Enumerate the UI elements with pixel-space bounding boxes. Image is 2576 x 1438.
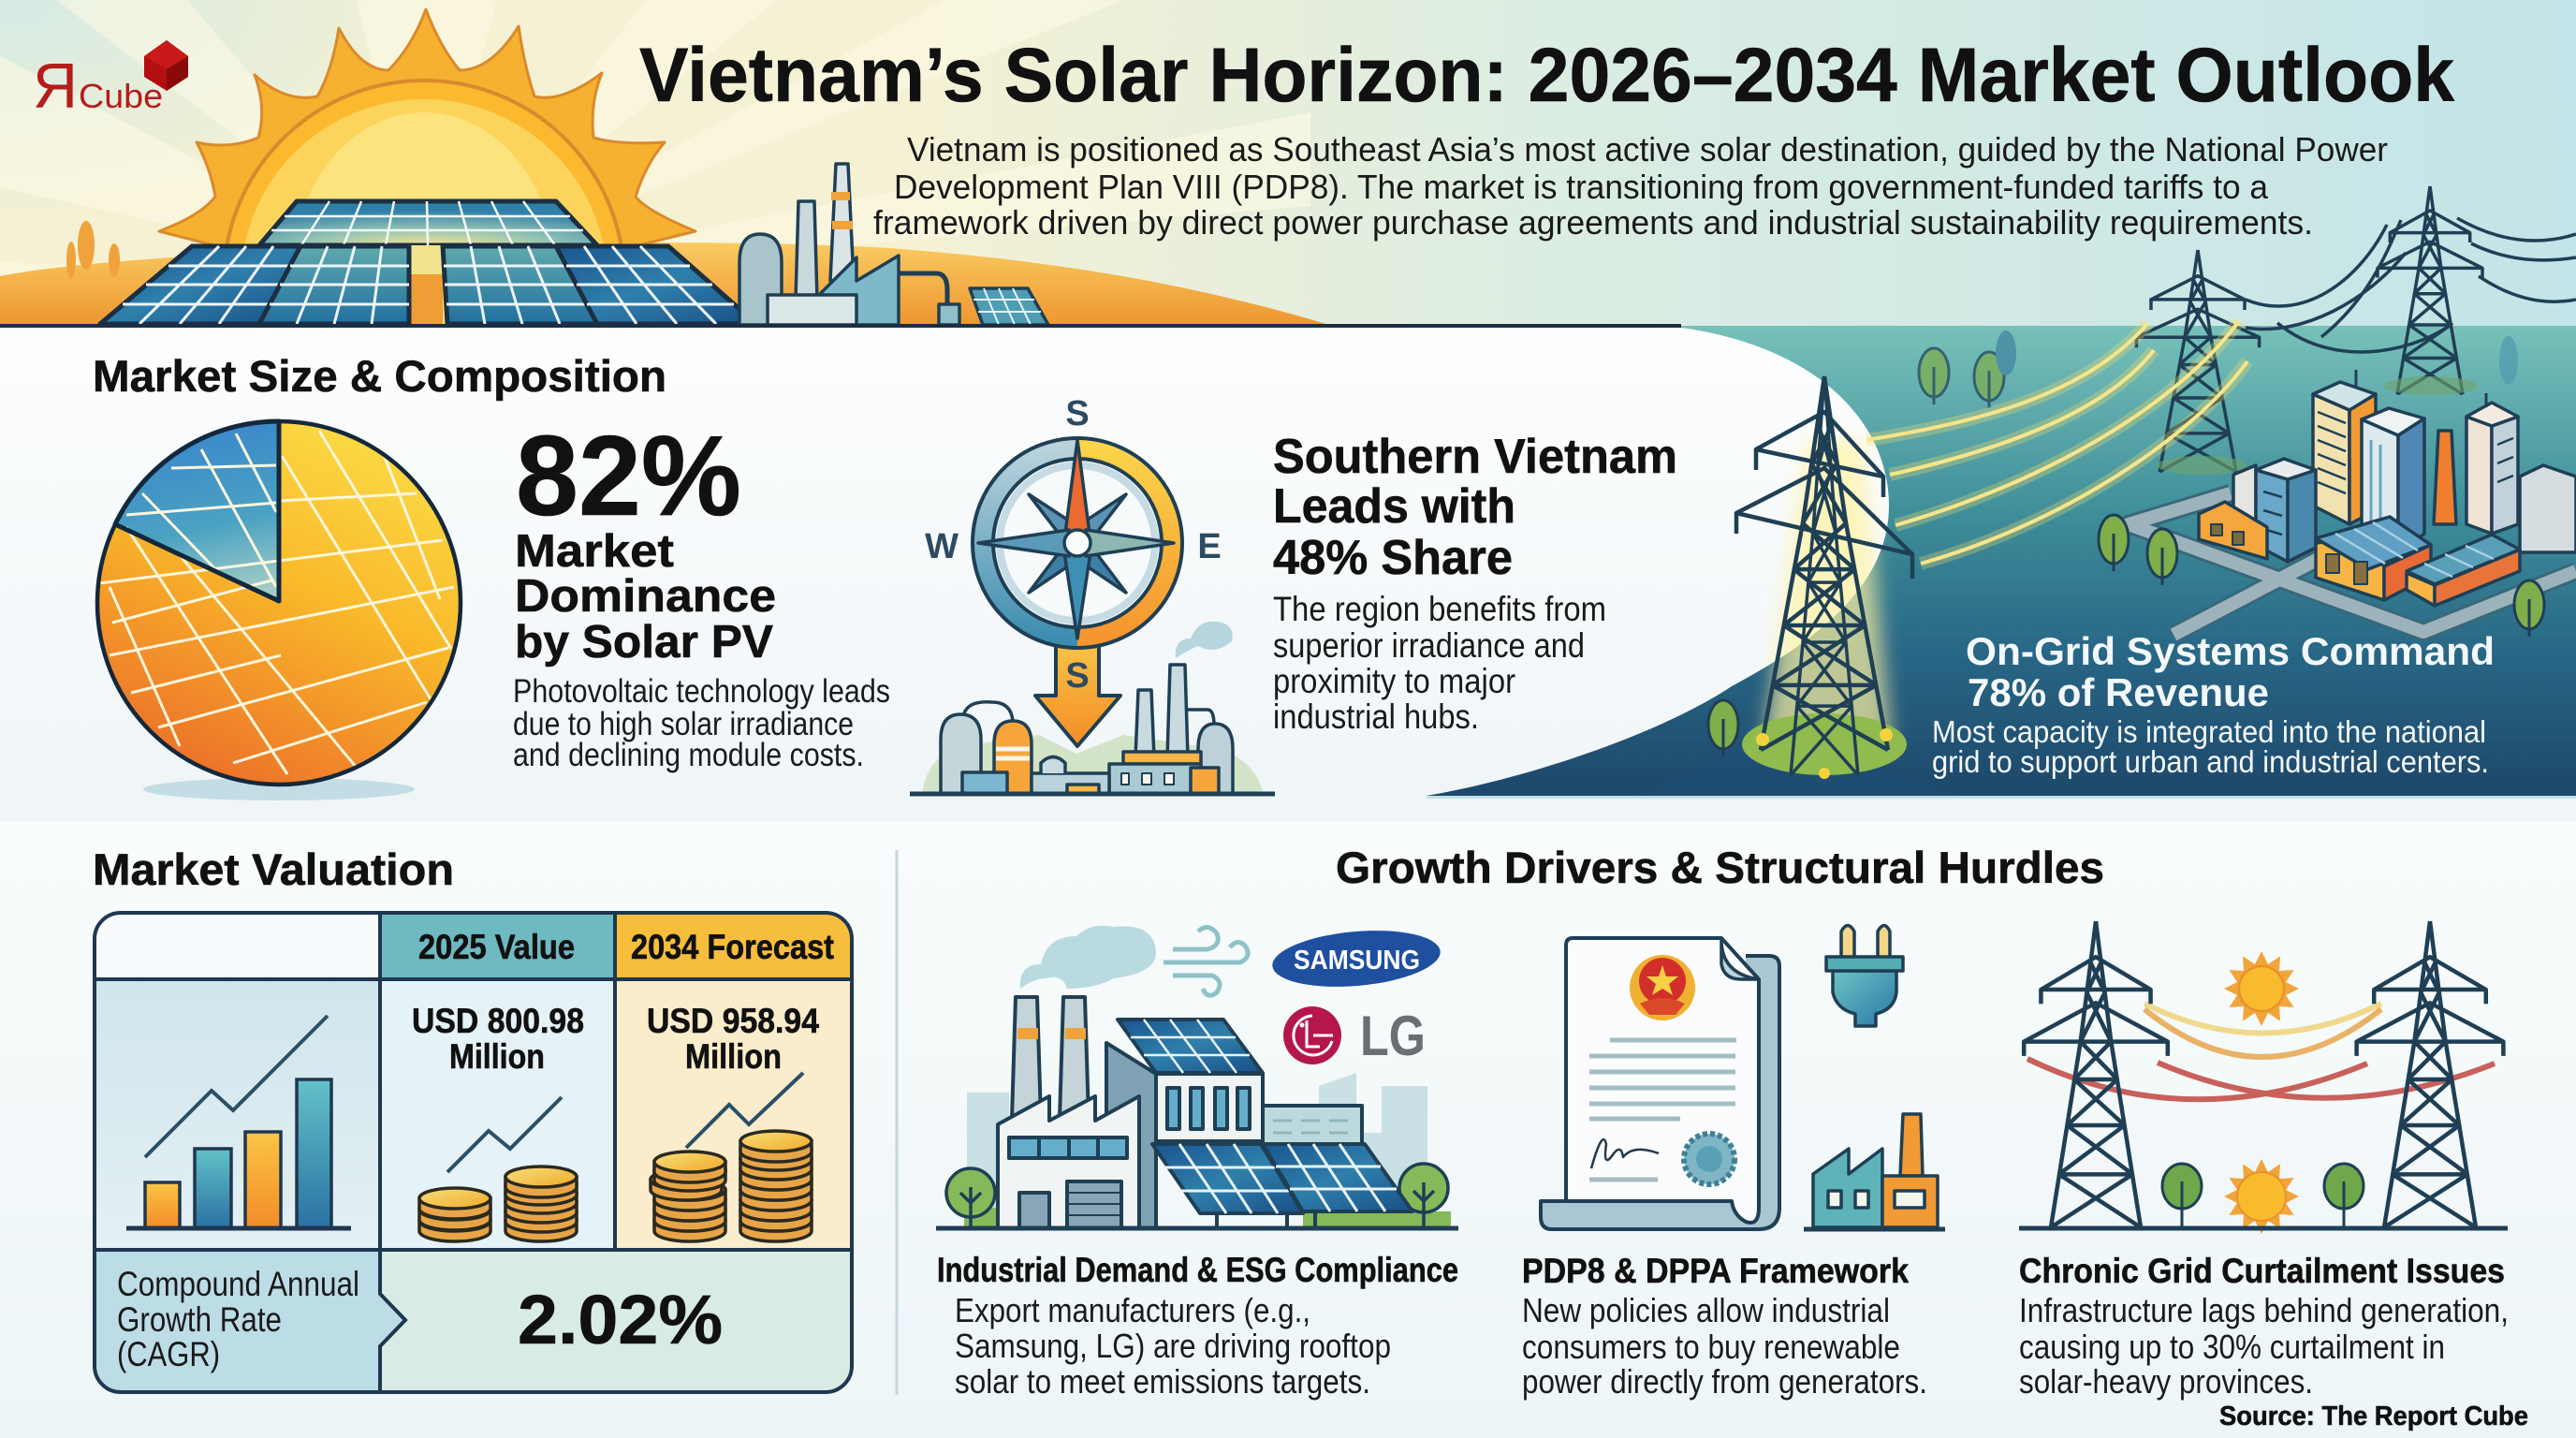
compass factory (922, 665, 1264, 794)
icon: growth bar chart (126, 1016, 351, 1228)
subheading: market dominance: by Solar PV (515, 617, 773, 668)
main glowing tower (1708, 376, 1912, 779)
on-grid description: grid to support urban and industrial centers. (1932, 744, 2489, 779)
driver: PDP8 and DPPA: consumers to buy renewable (1522, 1328, 1900, 1366)
text: photovoltaic description: and declining module costs. (513, 737, 864, 773)
header base line (0, 324, 1681, 328)
source note: Source: The Report Cube (2219, 1401, 2528, 1431)
small orange trees (66, 221, 120, 279)
driver: PDP8 and DPPA (1522, 1252, 1927, 1401)
glowing wires (1866, 321, 2247, 564)
logo: RCube (33, 40, 188, 122)
icon: power plug (1826, 925, 1903, 1026)
solar panels (100, 201, 756, 325)
logo: Samsung: SAMSUNG (1294, 946, 1420, 976)
icon: coins 2025 (419, 1097, 577, 1241)
suns (2224, 951, 2299, 1234)
subheading: market dominance: Dominance (515, 571, 776, 622)
CAGR cell: Compound Annual (117, 1265, 359, 1303)
header cell: 2034 forecast (615, 913, 852, 979)
text: photovoltaic description: Photovoltaic technology leads (513, 673, 890, 710)
sun rays background (0, 0, 1310, 276)
logo: RCube: Я (33, 51, 78, 122)
logo: LG: LG (1360, 1005, 1426, 1067)
compass letters: E (1197, 527, 1222, 566)
intro paragraph: Vietnam is positioned as Southeast Asia’s most active solar destination, guided by the National Power (907, 130, 2388, 169)
value: 2025: Million (449, 1037, 545, 1076)
driver: PDP8 and DPPA: power directly from generators. (1522, 1362, 1927, 1401)
compass arrow (1035, 639, 1120, 746)
value: 2034: USD 958.94 (647, 1002, 819, 1040)
header transmission towers (2136, 186, 2576, 475)
text: photovoltaic description: due to high solar irradiance (513, 706, 854, 742)
smoke (1176, 622, 1233, 658)
on-grid description: Most capacity is integrated into the national (1932, 714, 2486, 749)
city illustration (2099, 370, 2576, 637)
intro paragraph: framework driven by direct power purchase agreements and industrial sustainability requirements. (873, 203, 2313, 242)
subheading: market dominance (515, 526, 776, 668)
on-grid heading: On-Grid Systems Command (1966, 629, 2495, 673)
driver: PDP8 and DPPA: New policies allow industrial (1522, 1291, 1890, 1329)
header cell: 2025 value: 2025 Value (418, 928, 575, 966)
compass letters: W (925, 527, 959, 566)
header cell: 2034 forecast: 2034 Forecast (631, 928, 834, 966)
emblem (1630, 955, 1695, 1020)
text: photovoltaic description (513, 673, 890, 773)
hurdle: grid curtailment: solar-heavy provinces. (2019, 1362, 2313, 1401)
text: southern vietnam description (1273, 590, 1606, 736)
header industrial plant (739, 164, 1048, 325)
icon: policy document (1541, 938, 1779, 1229)
intro paragraph: Development Plan VIII (PDP8). The market is transitioning from government-funded tariffs to a (894, 168, 2269, 206)
text: southern vietnam description: proximity to major (1273, 662, 1515, 700)
page background (0, 326, 2576, 1438)
orange hills (0, 242, 1339, 328)
stat: 82 percent: 82% (516, 412, 741, 539)
hurdle: grid curtailment: causing up to 30% curtailment in (2019, 1328, 2445, 1366)
table: market valuation (95, 913, 852, 1392)
trees (946, 1164, 1451, 1228)
trees (2162, 1164, 2364, 1228)
driver: industrial demand: solar to meet emissions targets. (955, 1362, 1370, 1401)
on-grid description (1932, 714, 2489, 779)
hurdle: grid curtailment: Infrastructure lags behind generation, (2019, 1291, 2509, 1329)
on-grid heading (1966, 629, 2495, 714)
driver: industrial demand (937, 1251, 1458, 1401)
CAGR cell: 2.02% (518, 1281, 723, 1358)
CAGR cell: Growth Rate (117, 1300, 282, 1339)
on-grid heading: 78% of Revenue (1968, 670, 2269, 714)
smoke (1020, 926, 1156, 989)
icon: coins 2034 (651, 1073, 812, 1241)
hurdle: grid curtailment (2019, 1252, 2509, 1401)
icon: compass pointing south (910, 394, 1275, 794)
driver: industrial demand: Export manufacturers (e.g., (955, 1291, 1310, 1329)
icon: compass pointing south: S (1065, 656, 1090, 696)
heading: market size and composition: Market Size & Composition (93, 351, 666, 401)
heading: southern vietnam: 48% Share (1273, 531, 1513, 585)
header cell: 2025 value (380, 913, 615, 979)
text: southern vietnam description: The region benefits from (1273, 590, 1606, 628)
hurdle: grid curtailment: Chronic Grid Curtailment Issues (2019, 1252, 2505, 1290)
driver: industrial demand: Samsung, LG) are driving rooftop (955, 1327, 1391, 1365)
value: 2025 (412, 1002, 584, 1076)
subheading: market dominance: Market (515, 526, 674, 577)
icon: solar factory (936, 926, 1458, 1228)
icon: grid towers with curtailed lines (2019, 921, 2508, 1234)
value: 2034: Million (685, 1037, 782, 1076)
driver: industrial demand: Industrial Demand & ESG Compliance (937, 1251, 1458, 1289)
title: Vietnam’s Solar Horizon: 2026–2034 Market Outlook (639, 33, 2454, 118)
sun (157, 7, 696, 324)
heading: southern vietnam (1273, 430, 1677, 585)
wires (2027, 1004, 2495, 1099)
value: 2034 (647, 1002, 819, 1076)
wind (1164, 927, 1248, 995)
distant trees (1919, 330, 2518, 408)
CAGR cell (95, 1250, 852, 1392)
logo: LG (1283, 1005, 1426, 1067)
logo: Samsung (1270, 924, 1442, 993)
backdrop buildings (967, 1073, 1427, 1228)
compass letters: S (1065, 394, 1090, 433)
CAGR cell: (CAGR) (117, 1335, 220, 1373)
intro paragraph (873, 130, 2388, 242)
panel: on-grid systems (1427, 186, 2576, 799)
logo: RCube: Cube (79, 77, 163, 115)
text: southern vietnam description: industrial hubs. (1273, 697, 1479, 736)
driver: PDP8 and DPPA: PDP8 & DPPA Framework (1522, 1252, 1909, 1290)
icon: small factory (1804, 1114, 1945, 1229)
compass ring (983, 448, 1077, 638)
heading: southern vietnam: Leads with (1273, 479, 1515, 534)
value: 2025: USD 800.98 (412, 1002, 584, 1040)
heading: growth drivers and structural hurdles: Growth Drivers & Structural Hurdles (1336, 843, 2104, 892)
text: southern vietnam description: superior irradiance and (1273, 626, 1585, 665)
compass letters (925, 394, 1222, 566)
pie chart: 82 percent solar PV (97, 421, 461, 800)
header banner (0, 0, 2576, 328)
heading: southern vietnam: Southern Vietnam (1273, 430, 1677, 484)
heading: market valuation: Market Valuation (93, 844, 454, 894)
